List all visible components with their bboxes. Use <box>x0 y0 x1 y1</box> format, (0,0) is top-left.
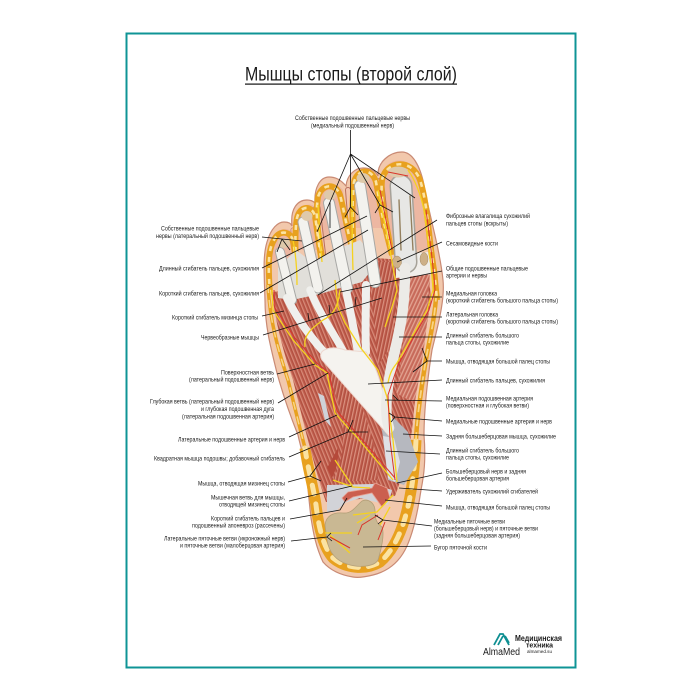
label: flexor hallucis longus tendon lower: Длинный сгибатель большого <box>446 446 519 454</box>
label: flexor hallucis longus tendon lower: пальца стопы, сухожилие <box>446 454 509 462</box>
label: flexor digitorum brevis and aponeurosis: подошвенный апоневроз (рассечены) <box>192 522 285 530</box>
web slots between toes <box>293 182 385 262</box>
label: deep branch: и глубокая подошвенная дуга <box>201 405 274 413</box>
label: medial calcaneal branches: (большеберцовый нерв) и пяточные ветви <box>434 524 538 532</box>
label: flexor hallucis longus tendon upper: Длинный сгибатель большого <box>446 332 519 340</box>
title: Мышцы стопы (второй слой) <box>245 64 457 86</box>
label: deep branch: Глубокая ветвь (латеральный подошвенный нерв) <box>150 398 274 406</box>
label: medial head: Медиальная головка <box>446 290 497 298</box>
teal frame <box>126 34 576 668</box>
label: superficial branch <box>189 364 315 384</box>
label: common plantar digital arteries and nerves: Общие подошвенные пальцевые <box>446 264 528 272</box>
label: muscular branch: Мышечная ветвь для мышцы, <box>211 494 285 502</box>
label: medial head: (короткий сгибатель большого пальца стопы) <box>446 296 558 304</box>
label: tibialis posterior tendon: Задняя большеберцовая мышца, сухожилие <box>446 432 556 440</box>
label: abductor hallucis lower: Мышца, отводящая большой палец стопы <box>446 504 550 512</box>
label: abductor digiti minimi <box>198 461 321 488</box>
label: flexor digitorum brevis and aponeurosis: Короткий сгибатель пальцев и <box>211 514 285 522</box>
label: lumbricals: Червеобразные мышцы <box>201 334 259 342</box>
label: calcaneal tuberosity: Бугор пяточной кости <box>434 544 487 552</box>
label: flexor digitorum brevis and aponeurosis <box>192 498 347 530</box>
label: digital nerves lateral: нервы (латеральный подошвенный нерв) <box>156 232 259 240</box>
plantar muscles <box>272 258 431 502</box>
label: lateral calcaneal branches: и пяточные ветви (малоберцовая артерия) <box>180 542 285 550</box>
label: digital nerves medial: (медиальный подошвенный нерв) <box>311 122 394 130</box>
toe fat rings <box>269 164 437 300</box>
label: digital nerves lateral <box>156 224 302 252</box>
label: short flexor of little toe: Короткий сгибатель мизинца стопы <box>172 314 258 322</box>
label: digital nerves medial: Собственные подошвенные пальцевые нервы <box>295 114 410 122</box>
label: long flexor tendons right: Длинный сгибатель пальцев, сухожилия <box>446 376 545 384</box>
sole fat pad <box>268 285 436 567</box>
label: lateral head: Латеральная головка <box>446 312 498 318</box>
label: fibrous sheaths <box>318 212 530 295</box>
label: muscular branch: отводящей мизинец стопы <box>219 500 285 508</box>
label: quadratus plantae <box>154 420 368 462</box>
label: deep branch: (латеральная подошвенная артерия) <box>182 414 274 420</box>
label: medial calcaneal branches: (задняя большеберцовая артерия) <box>434 532 520 540</box>
label: digital nerves lateral: Собственные подошвенные пальцевые <box>161 224 259 232</box>
label: lumbricals <box>201 297 382 342</box>
label: abductor hallucis upper <box>413 348 550 372</box>
label: lateral plantar artery and nerve <box>178 415 337 444</box>
label: superficial branch: (латеральный подошвенный нерв) <box>189 376 274 384</box>
sesamoid bones <box>392 252 428 268</box>
label: tibial nerve and artery <box>397 468 526 483</box>
label: flexor hallucis longus tendon upper <box>399 332 519 346</box>
toe flexor tendons <box>280 186 413 300</box>
toe pulp tint <box>269 160 432 262</box>
cut muscles and retinaculum <box>327 448 390 507</box>
label: abductor hallucis lower <box>385 500 550 512</box>
label: short flexor of little toe <box>172 311 284 322</box>
label: superficial branch: Поверхностная ветвь <box>221 370 274 376</box>
label: lateral head: (короткий сгибатель большого пальца стопы) <box>446 318 558 326</box>
label: flexor retinaculum: Удерживатель сухожилий сгибателей <box>446 488 538 496</box>
label: fibrous sheaths: Фиброзные влагалища сухожилий <box>446 212 530 220</box>
forefoot tendons and ligaments <box>278 240 432 300</box>
label: medial calcaneal branches: Медиальные пяточные ветви <box>434 518 505 526</box>
label: calcaneal tuberosity <box>363 544 487 552</box>
label: medial plantar artery: Медиальная подошвенная артерия <box>446 396 533 402</box>
label: digital nerves medial <box>295 114 415 232</box>
logo: техника <box>526 640 554 650</box>
label: medial plantar artery and nerve: Медиальные подошвенные артерия и нерв <box>446 418 552 426</box>
long flexor tendon fan <box>287 268 405 438</box>
label: lateral calcaneal branches <box>164 533 332 550</box>
label: long flexor tendons right <box>368 376 545 384</box>
label: deep branch <box>150 373 328 420</box>
label: long flexor tendons left: Длинный сгибатель пальцев, сухожилия <box>159 264 259 272</box>
arteries <box>274 172 435 548</box>
logo <box>483 634 562 658</box>
toe tip bones <box>278 166 408 248</box>
label: sesamoid bones: Сесамовидные кости <box>446 240 498 248</box>
label: medial head <box>422 290 558 304</box>
toe fat lobules <box>269 164 437 300</box>
logo: almamed.su <box>527 649 553 654</box>
label: medial plantar artery <box>385 395 533 410</box>
label: abductor digiti minimi: Мышца, отводящая мизинец стопы <box>198 480 285 488</box>
label: medial calcaneal branches <box>375 515 538 540</box>
label: flexor hallucis longus tendon lower <box>386 446 519 462</box>
label: medial plantar artery: (поверхностная и глубокая ветви) <box>446 402 529 410</box>
label: sesamoid bones <box>397 240 498 262</box>
label: lateral calcaneal branches: Латеральные пяточные ветви (икроножный нерв) <box>164 534 285 542</box>
label: lateral head <box>393 312 558 326</box>
logo: Медицинская <box>515 634 562 643</box>
label: flexor hallucis longus tendon upper: пальца стопы, сухожилие <box>446 340 509 346</box>
calcaneus <box>325 500 383 566</box>
logo: AlmaMed <box>483 647 520 658</box>
label: abductor hallucis upper: Мышца, отводящая большой палец стопы <box>446 358 550 366</box>
label: common plantar digital arteries and nerves <box>340 264 528 292</box>
label: short flexor tendons: Короткий сгибатель пальцев, сухожилия <box>159 290 259 298</box>
label: quadratus plantae: Квадратная мышца подошвы; добавочный сгибатель <box>154 454 285 462</box>
label: tibial nerve and artery: Большеберцовый нерв и задняя <box>446 468 526 476</box>
label: medial plantar artery and nerve <box>389 413 552 426</box>
label: common plantar digital arteries and nerves: артерии и нервы <box>446 272 487 280</box>
label: muscular branch <box>211 486 352 508</box>
label: lateral plantar artery and nerve: Латеральные подошвенные артерия и нерв <box>178 436 285 444</box>
nerves <box>272 170 433 553</box>
label: flexor retinaculum <box>399 488 538 496</box>
grey tendon sheaths <box>318 393 418 512</box>
label: tibial nerve and artery: большеберцовая артерия <box>446 474 509 482</box>
foot illustration <box>264 152 443 577</box>
icon: AlmaMed mark <box>494 634 509 645</box>
label: fibrous sheaths: пальцев стопы (вскрыты) <box>446 220 508 228</box>
label: long flexor tendons left <box>159 216 367 272</box>
skin outline <box>264 152 443 577</box>
label: short flexor tendons <box>159 230 368 298</box>
